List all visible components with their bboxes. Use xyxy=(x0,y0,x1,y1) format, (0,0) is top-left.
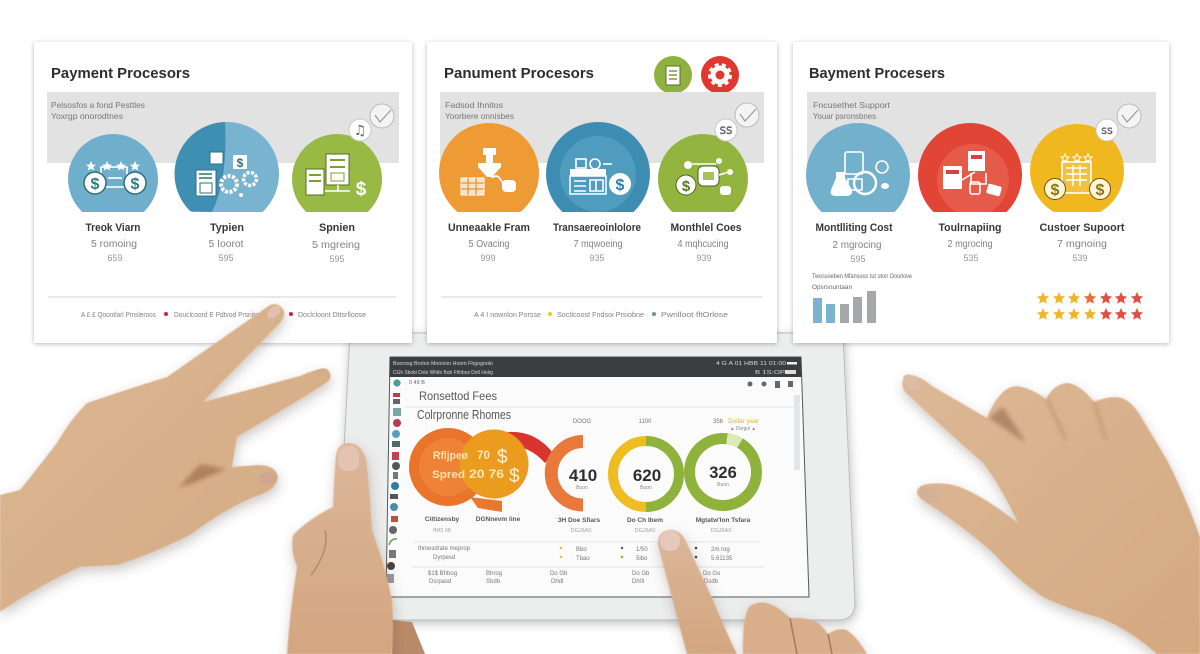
shading between fingers xyxy=(178,464,226,488)
ring chart sub captions xyxy=(433,528,731,534)
bar chart caption xyxy=(812,273,912,291)
data table: Do Go xyxy=(703,571,721,577)
column one text: 595 xyxy=(850,254,866,264)
column three text: 7 mgnoing xyxy=(1057,239,1107,250)
footer legend: A £ £ Qoontlarl Pmsleroos xyxy=(81,310,156,319)
band text: Yoorbere onnisbes xyxy=(445,111,514,121)
icon: green clipboard xyxy=(654,56,692,94)
column two text: 5 Ioorot xyxy=(208,239,244,250)
data table: 2m rog xyxy=(711,547,730,553)
column three text: 4 mqhcucing xyxy=(678,239,728,250)
icon circle: ratings and dollars: $ xyxy=(131,176,140,193)
thumb nail xyxy=(258,469,278,487)
overlapping orange circles with fee text: 20 76 xyxy=(469,467,504,481)
screen header bar: B 1S:OP xyxy=(755,370,785,376)
panel: payment processors middle xyxy=(427,42,777,343)
ring chart captions xyxy=(425,516,751,524)
column two text: 2 mgrocing xyxy=(948,239,992,250)
bar chart xyxy=(813,291,876,323)
screen sidebar icons xyxy=(387,379,401,583)
ring chart sub captions: fNf3 98 xyxy=(433,528,451,534)
data table: Dsdb xyxy=(704,579,719,585)
column three text xyxy=(1040,222,1125,263)
column two text: 595 xyxy=(218,253,234,263)
lower hand tapping tablet xyxy=(658,530,867,654)
data table xyxy=(412,542,764,585)
data table: Dsrpasd xyxy=(429,579,451,585)
ring chart: 326: Buon xyxy=(717,482,729,488)
badge: music note: ♫ xyxy=(354,123,366,139)
band text xyxy=(51,100,145,121)
toolbar icons xyxy=(748,381,793,388)
column one text: Unneaakle Fram xyxy=(448,222,530,234)
column one text: 2 mgrocing xyxy=(832,240,882,251)
footer legend xyxy=(81,310,366,319)
ring chart: 410: 410 xyxy=(569,466,597,485)
screen header bar: Boorosg Broton Mnonion Hoom Fhgognolo xyxy=(393,361,493,367)
panel: payment processors left xyxy=(34,42,412,343)
data table: Ihmesdrate meprop xyxy=(418,546,471,552)
column one text: 999 xyxy=(480,253,496,263)
icon circle: yellow customer support: $ xyxy=(1051,182,1060,199)
ring chart sub captions: DGJ6A0 xyxy=(635,528,655,534)
footer legend: Douclcoord E Pdtvod Prsnitos xyxy=(174,310,262,319)
column two text: 535 xyxy=(963,253,979,263)
ring chart top labels: ▲ Dorgol ▲ xyxy=(730,426,756,432)
column one text xyxy=(816,222,893,264)
column three text: 939 xyxy=(696,253,712,263)
fingernail xyxy=(660,531,680,551)
icon circle: green documents: $ xyxy=(356,179,367,200)
band text: Yoxrgp onorodtnes xyxy=(51,111,123,121)
left hand pointing xyxy=(0,303,331,612)
icon circle: yellow customer support xyxy=(1030,124,1124,218)
screen headings xyxy=(405,380,798,422)
overlapping orange circles with fee text: Spred xyxy=(432,469,465,481)
screen headings: 0 49 B xyxy=(409,380,425,386)
icon circle: green monthly cost: $ xyxy=(682,178,691,195)
column three text: Monthlel Coes xyxy=(670,222,742,234)
knuckle separators xyxy=(790,618,832,654)
column one text: 659 xyxy=(107,253,123,263)
data table: Shdb xyxy=(486,579,501,585)
data table: Do Gb xyxy=(632,571,650,577)
icon circle: blue transaction: $ xyxy=(616,177,625,194)
tablet device xyxy=(336,333,855,620)
band text xyxy=(813,100,891,121)
column three text: 595 xyxy=(329,254,345,264)
column two text: Typien xyxy=(210,222,244,234)
overlapping orange circles with fee text: Rfljpeø xyxy=(433,450,468,462)
ring chart: 620 xyxy=(613,441,679,507)
icon circle: red tournament xyxy=(918,123,1022,212)
index fingernail xyxy=(265,303,283,321)
column two text xyxy=(208,222,244,263)
column one text xyxy=(448,222,530,263)
data table: 5ibo xyxy=(636,556,648,562)
ring chart sub captions: DGJ6A0 xyxy=(571,528,591,534)
ring chart: 410 xyxy=(551,442,597,505)
icon circle: green monthly cost xyxy=(658,134,748,212)
badge: check mark xyxy=(735,103,759,127)
ring chart: 620: Buon xyxy=(640,485,652,491)
data table: Dh0l xyxy=(632,579,644,585)
ring chart captions: DGNnevm line xyxy=(476,516,521,523)
screen header bar xyxy=(389,357,802,377)
column three text: Spnien xyxy=(319,222,355,234)
badge: music note xyxy=(349,119,371,141)
star ratings xyxy=(1037,292,1143,320)
screen headings: Ronsettod Fees xyxy=(419,389,497,403)
ring chart top labels: DOOG xyxy=(573,419,591,425)
footer legend: A 4 I nownlon Porsse xyxy=(474,310,541,319)
band text xyxy=(445,100,514,121)
ring chart: 326 xyxy=(690,438,756,506)
ring chart captions: Mgtatw'lon Tsfara xyxy=(696,517,751,524)
column three text: 539 xyxy=(1072,253,1088,263)
bar chart caption: Twossoeben Mfansoos tut oton Ooorlove xyxy=(812,273,912,280)
column two text: 7 mqwoeing xyxy=(574,239,622,250)
thumb nail xyxy=(917,485,943,505)
tablet screen xyxy=(386,357,809,597)
column one text: 5 Ovacing xyxy=(468,239,510,250)
ring chart: 326: 326 xyxy=(709,464,737,482)
ring chart captions: 3H Doe Sfiars xyxy=(558,517,601,524)
grey band xyxy=(47,92,399,163)
column one text: Montlliting Cost xyxy=(816,222,893,234)
icon circle: green documents xyxy=(292,134,382,212)
data table: Tbao xyxy=(576,556,590,562)
band text: Youar psronsbnes xyxy=(813,111,876,121)
data table: Dyrpesd xyxy=(433,555,455,561)
column three text: Custoer Supoort xyxy=(1040,222,1125,234)
data table: 5.61135 xyxy=(711,556,733,562)
data table: Dhdl xyxy=(551,579,563,585)
footer legend: Soctlcoost Fndsoi Prsiobne xyxy=(557,310,644,319)
column one text: Treok Viarn xyxy=(86,222,141,234)
lower left hand holding tablet xyxy=(287,443,425,654)
footer legend: Doclcloont Dttsrfloose xyxy=(298,310,366,319)
data table: Bbo xyxy=(576,547,587,553)
ring chart sub captions: DGJ6A0 xyxy=(711,528,731,534)
data table: 1/50 xyxy=(636,547,648,553)
column two text xyxy=(938,222,1002,263)
panel: payment processors right xyxy=(793,42,1169,343)
ring chart: 410: Buon xyxy=(576,485,588,491)
heading: Payment Procesors xyxy=(51,66,190,82)
overlapping orange circles with fee text: 70 xyxy=(477,448,490,462)
icon circle: orange funnel xyxy=(439,123,539,212)
overlapping orange circles with fee text xyxy=(409,428,553,512)
column three text xyxy=(670,222,742,263)
right hand pointing xyxy=(901,373,1200,654)
footer legend xyxy=(474,310,728,319)
index fingernail xyxy=(901,373,923,393)
badge: small glyph xyxy=(715,119,737,141)
band text: Fncusethet Support xyxy=(813,100,891,110)
grey band xyxy=(807,92,1156,163)
bar chart caption: Opsrsnuntaan xyxy=(812,284,852,291)
screen header bar: CGh Sbobi Dolo Whtlo Bob Fhhbos Dolt Holrg xyxy=(393,370,493,376)
screen header bar: 4 G A 01 HBB 11 01:00 xyxy=(716,361,786,367)
icon circle: blue transaction xyxy=(546,122,650,212)
column one text: 5 romoing xyxy=(91,239,137,250)
screen headings: Colrpronne Rhomes xyxy=(417,408,511,422)
badge: small glyph xyxy=(1096,119,1118,141)
grey band xyxy=(440,92,764,163)
scroll bar xyxy=(794,395,800,470)
heading: Bayment Procesers xyxy=(809,66,945,82)
badge: check mark xyxy=(370,104,394,128)
gap between fingers xyxy=(989,407,1026,443)
data table: Do Gb xyxy=(550,571,568,577)
ring chart captions: Ciltizensby xyxy=(425,516,460,523)
footer legend: Pwnlloot fltOrlose xyxy=(661,310,728,319)
badge: small glyph: ꓢꓢ xyxy=(720,126,733,137)
icon circle: documents and gears: $ xyxy=(237,156,244,170)
band text: Pelsosfos a fond Pesttles xyxy=(51,100,145,110)
data table: $1$ Bhbog xyxy=(428,571,457,577)
column one text xyxy=(86,222,141,263)
icon circle: ratings and dollars: $ xyxy=(91,176,100,193)
ring chart top labels: 35b xyxy=(713,419,724,425)
icon circle: blue monitoring xyxy=(806,123,910,212)
ring chart top labels: 1100 xyxy=(639,419,652,425)
column three text: 5 mgreing xyxy=(312,240,360,251)
icon circle: documents and gears xyxy=(174,122,279,212)
ring chart captions: Do Ch Ibem xyxy=(627,517,663,524)
icon: red gear xyxy=(701,56,739,94)
badge: check mark xyxy=(1117,104,1141,128)
knuckle shading xyxy=(1047,399,1106,440)
column two text: Transaereoinlolore xyxy=(553,222,641,234)
ring chart: 620: 620 xyxy=(633,466,661,485)
band text: Fadsod Ihnitos xyxy=(445,100,503,110)
data table: Bhrog xyxy=(486,571,502,577)
overlapping orange circles with fee text: $ xyxy=(497,447,508,468)
icon circle: ratings and dollars xyxy=(68,134,158,212)
heading: Panument Procesors xyxy=(444,66,594,82)
badge: small glyph: ꓢꓢ xyxy=(1101,126,1113,136)
icon circle: yellow customer support: $ xyxy=(1096,182,1105,199)
column two text: Toulrnapiing xyxy=(938,222,1002,234)
thumb crease xyxy=(311,530,326,575)
ring chart top labels: Dollar year xyxy=(728,419,759,425)
column two text: 935 xyxy=(589,253,605,263)
column two text xyxy=(553,222,641,263)
ring chart top labels xyxy=(573,419,759,432)
second fingernail xyxy=(311,367,329,379)
thumb nail xyxy=(338,446,359,471)
overlapping orange circles with fee text: $ xyxy=(509,466,520,487)
column three text xyxy=(312,222,360,264)
